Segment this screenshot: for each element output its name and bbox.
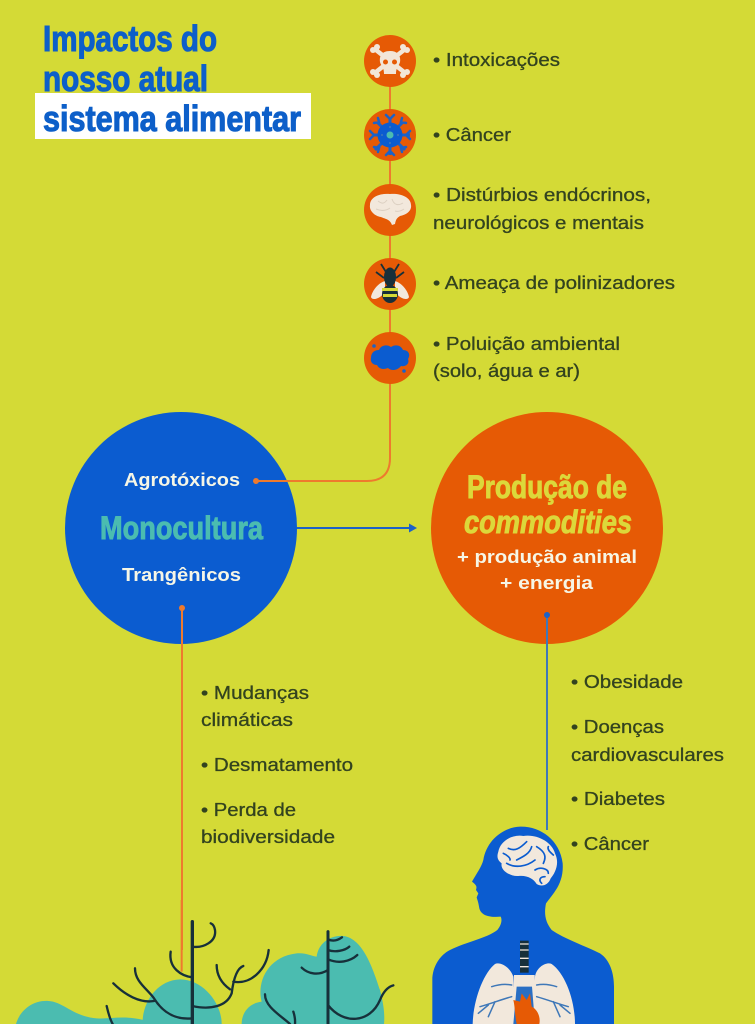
- panel: produção de commodities: + energia: [500, 573, 594, 593]
- title: nosso atual: [43, 58, 208, 99]
- text block: diseases: • Doenças: [571, 717, 664, 737]
- panel: monocultura: Monocultura: [100, 510, 263, 546]
- title: Impactos do: [43, 18, 217, 59]
- text block: health and environmental impacts of pesticides: neurológicos e mentais: [433, 213, 644, 233]
- text block: health and environmental impacts of pesticides: [433, 50, 675, 381]
- panel: monocultura: Agrotóxicos: [124, 470, 240, 490]
- panel: produção de commodities: + produção animal: [457, 547, 637, 567]
- text block: diseases: cardiovasculares: [571, 745, 724, 765]
- connector: commodities to body: [544, 612, 550, 830]
- text block: diseases: [571, 672, 724, 854]
- text block: environmental impacts: climáticas: [201, 710, 293, 730]
- text block: environmental impacts: • Perda de: [201, 800, 296, 820]
- illustration: trees: [16, 900, 393, 1024]
- title: sistema alimentar: [43, 98, 301, 139]
- text block: health and environmental impacts of pesticides: • Intoxicações: [433, 50, 560, 70]
- panel: monocultura: [65, 412, 297, 644]
- text block: environmental impacts: • Mudanças: [201, 683, 309, 703]
- panel: produção de commodities: commodities: [464, 504, 632, 540]
- illustration: human body with brain and lungs: [432, 827, 614, 1024]
- text block: health and environmental impacts of pesticides: • Poluição ambiental: [433, 334, 620, 354]
- text block: environmental impacts: [201, 683, 353, 847]
- trachea: [520, 941, 529, 973]
- panel: produção de commodities: [431, 412, 663, 644]
- connector: icon column line: [297, 61, 390, 481]
- brain: [497, 836, 557, 886]
- text block: health and environmental impacts of pesticides: • Distúrbios endócrinos,: [433, 185, 651, 205]
- icon: skull and crossbones: [364, 35, 416, 87]
- text block: environmental impacts: biodiversidade: [201, 827, 335, 847]
- text block: environmental impacts: • Desmatamento: [201, 755, 353, 775]
- icon: virus: [364, 109, 416, 161]
- text block: health and environmental impacts of pesticides: • Câncer: [433, 125, 511, 145]
- panel: monocultura: Trangênicos: [122, 565, 241, 585]
- icon: brain: [364, 184, 416, 236]
- text block: health and environmental impacts of pesticides: (solo, água e ar): [433, 361, 580, 381]
- icon: bee: [364, 258, 416, 310]
- text block: diseases: • Câncer: [571, 834, 649, 854]
- text block: diseases: • Obesidade: [571, 672, 683, 692]
- panel: produção de commodities: Produção de: [467, 469, 627, 505]
- connector: monocultura to environmental impacts: [181, 644, 183, 950]
- icon: pollution cloud: [364, 332, 416, 384]
- text block: diseases: • Diabetes: [571, 789, 665, 809]
- text block: health and environmental impacts of pesticides: • Ameaça de polinizadores: [433, 273, 675, 293]
- arrow: monocultura to commodities: [297, 524, 417, 532]
- heart: [513, 993, 540, 1024]
- lungs: [473, 963, 575, 1024]
- title: [35, 18, 311, 139]
